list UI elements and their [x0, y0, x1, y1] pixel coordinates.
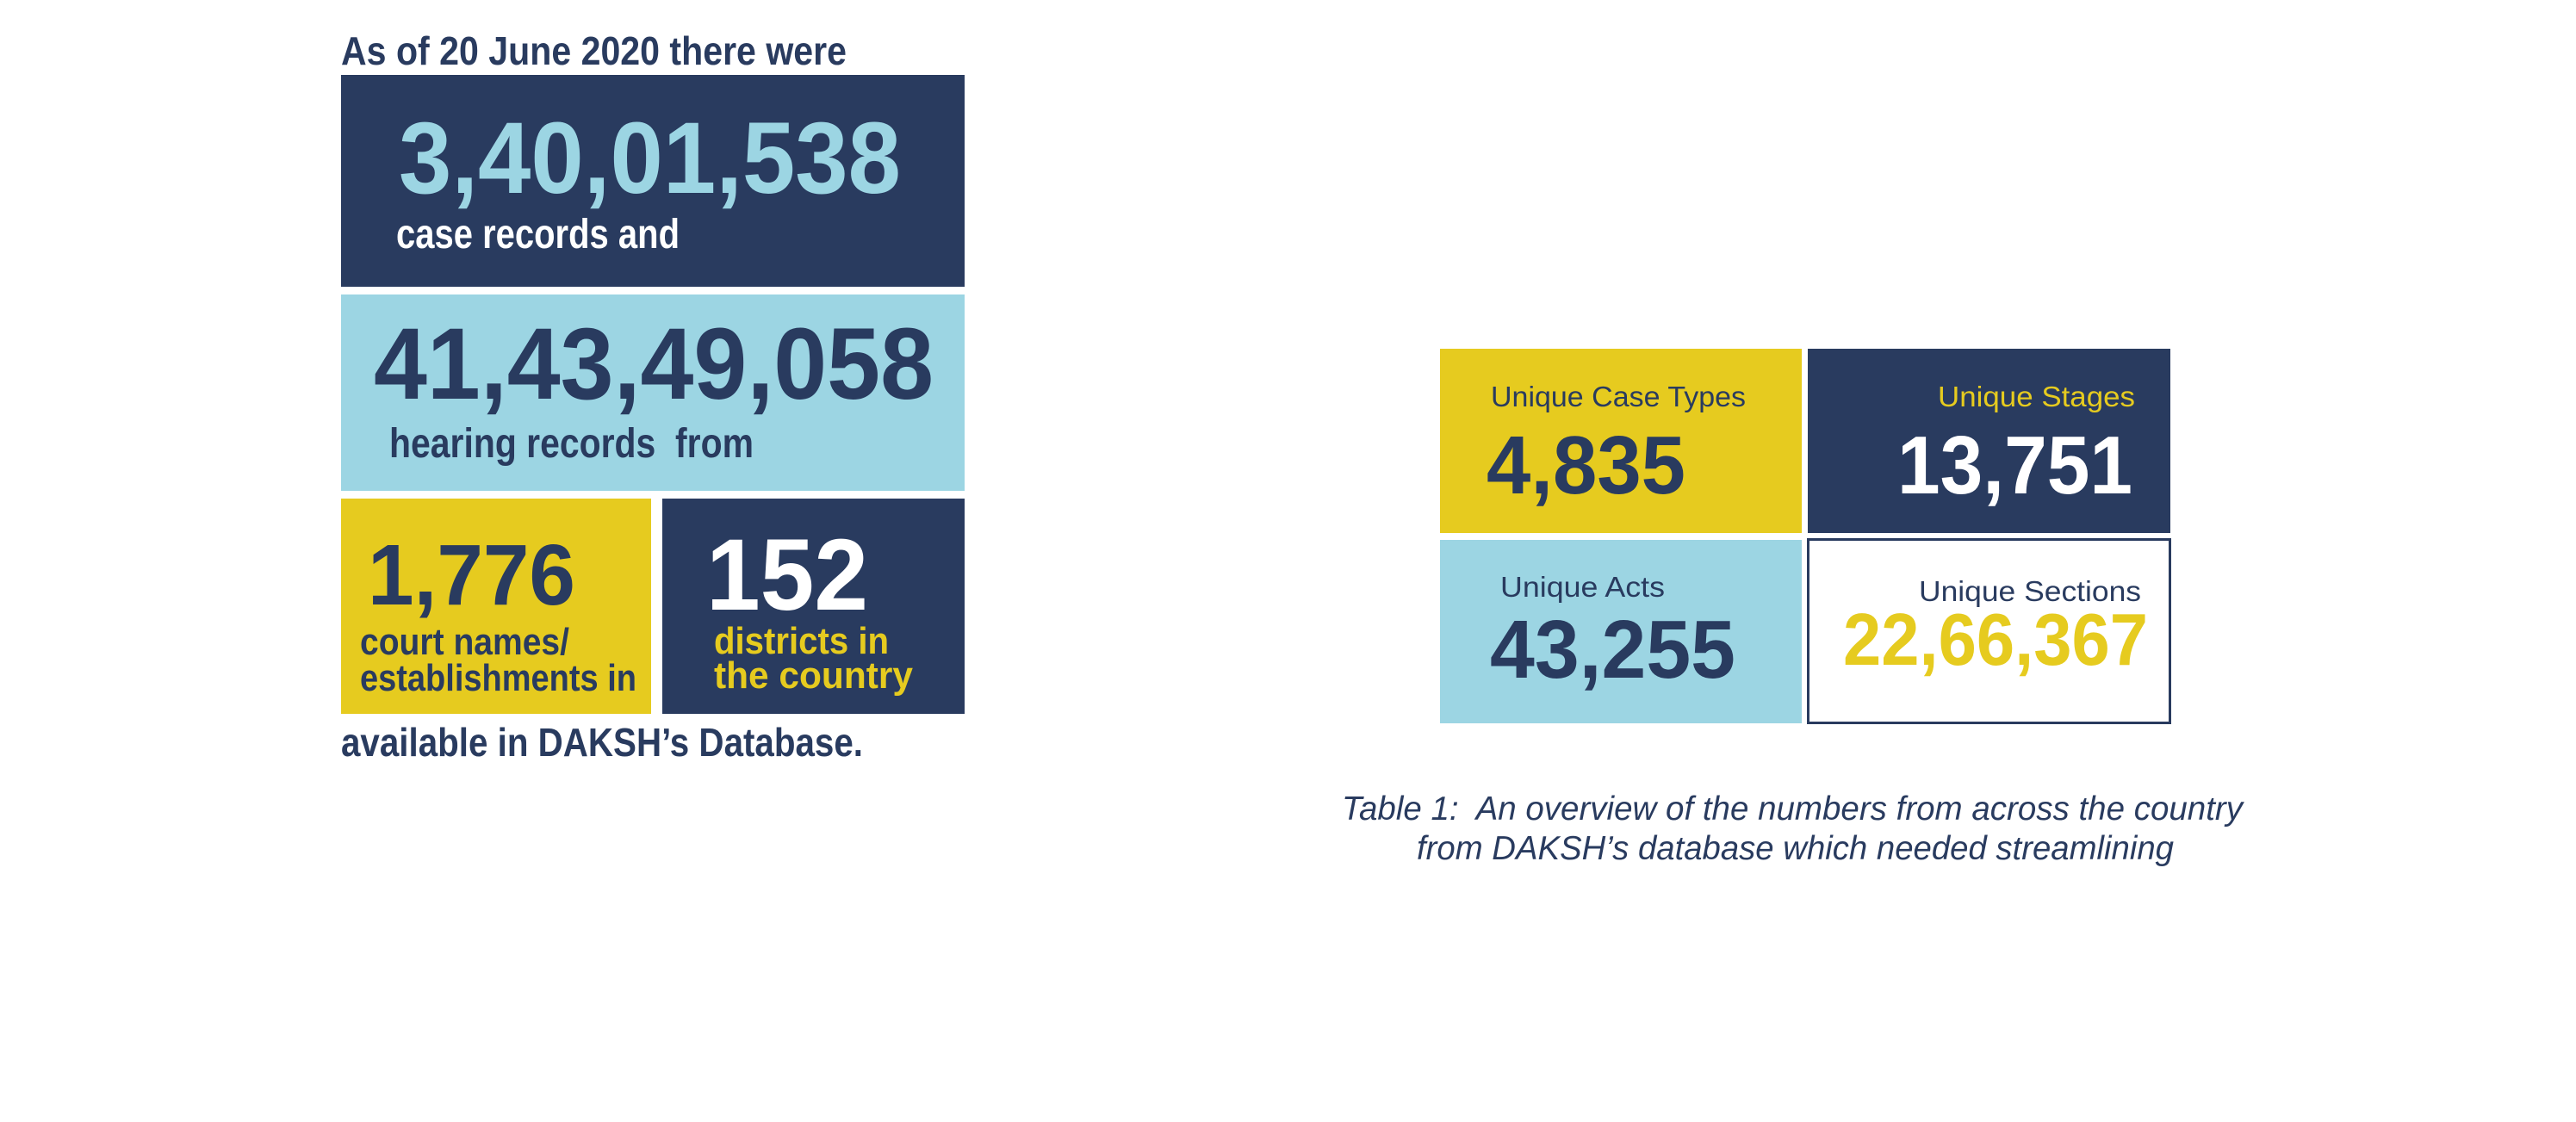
panel: unique acts: Unique Acts: [1500, 571, 1665, 603]
panel: districts: [662, 499, 965, 714]
panel: court names: court names/: [360, 621, 569, 663]
panel: unique case types: 4,835: [1487, 419, 1685, 511]
panel: hearing records: [341, 294, 965, 491]
panel: unique sections: 22,66,367: [1843, 599, 2148, 681]
panel: districts: the country: [714, 654, 914, 697]
panel: unique stages: Unique Stages: [1938, 381, 2135, 412]
panel: unique stages: 13,751: [1897, 419, 2132, 511]
panel: case records: [341, 75, 965, 287]
caption: table 1: from DAKSH’s database which needed streamlining: [1417, 830, 2174, 867]
panel: court names: [341, 499, 651, 714]
panel: unique acts: [1440, 540, 1802, 723]
caption: table 1: Table 1: An overview of the numbers from across the country: [1342, 790, 2244, 828]
panel: court names: establishments in: [360, 657, 636, 699]
panel: case records: case records and: [396, 212, 680, 257]
panel: hearing records: 41,43,49,058: [374, 307, 934, 421]
panel: unique case types: [1440, 349, 1802, 533]
panel: unique sections: Unique Sections: [1919, 575, 2141, 607]
panel: unique stages: [1808, 349, 2170, 533]
heading: as of date: As of 20 June 2020 there were: [341, 28, 847, 73]
panel: unique case types: Unique Case Types: [1491, 381, 1746, 412]
text: available in database: available in DAKSH’s Database.: [341, 720, 863, 765]
panel: districts: districts in: [714, 620, 889, 662]
caption: table 1: [1342, 790, 2244, 867]
panel: court names: 1,776: [368, 527, 575, 623]
panel: unique sections: [1809, 539, 2170, 723]
panel: case records: 3,40,01,538: [399, 102, 901, 215]
panel: districts: 152: [706, 518, 868, 632]
panel: hearing records: hearing records from: [389, 421, 754, 467]
panel: unique acts: 43,255: [1490, 604, 1735, 696]
